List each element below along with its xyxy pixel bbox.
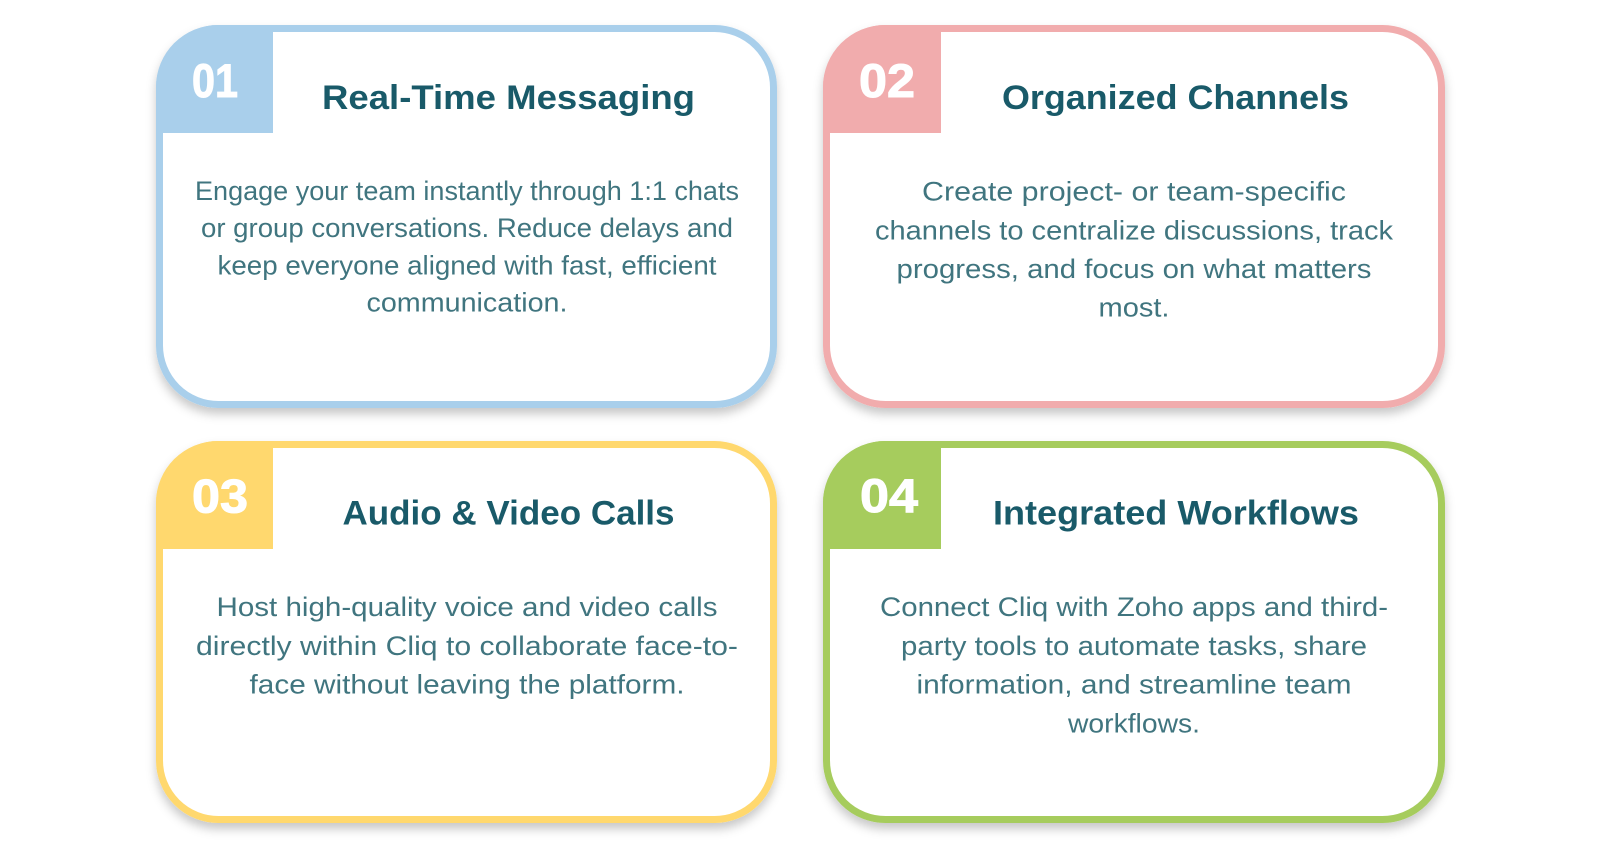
body text: face without leaving the platform.: [250, 670, 684, 700]
body text: most.: [1098, 292, 1170, 322]
heading: Organized Channels: [1002, 79, 1349, 117]
body text: channels to centralize discussions, track: [875, 215, 1394, 245]
body text: or group conversations. Reduce delays and: [201, 213, 733, 243]
body text: [880, 592, 1388, 738]
panel: Real-Time Messaging: [156, 25, 774, 404]
number tab: [823, 441, 941, 549]
body text: communication.: [366, 287, 568, 317]
number 01: 01: [192, 54, 238, 107]
body text: workflows.: [1067, 708, 1200, 738]
body text: Connect Cliq with Zoho apps and third-: [880, 592, 1388, 622]
body text: Create project- or team-specific: [922, 176, 1346, 206]
panel: Organized Channels: [823, 25, 1442, 404]
card outline: [160, 28, 774, 404]
heading: Integrated Workflows: [993, 494, 1359, 532]
body text: Host high-quality voice and video calls: [216, 592, 718, 622]
panel: Audio & Video Calls: [156, 441, 774, 820]
heading: Audio & Video Calls: [342, 494, 674, 532]
card outline: [160, 444, 774, 820]
body text: progress, and focus on what matters: [896, 254, 1372, 284]
number 04: 04: [860, 469, 918, 522]
number 03: 03: [192, 470, 248, 522]
number tab: [823, 25, 941, 133]
number tab: [156, 441, 273, 549]
card outline: [826, 28, 1442, 404]
body text: [875, 176, 1394, 322]
body text: [195, 176, 739, 317]
number 02: 02: [859, 54, 915, 107]
panel: Integrated Workflows: [823, 441, 1442, 820]
body text: directly within Cliq to collaborate face-to-: [196, 631, 738, 661]
body text: party tools to automate tasks, share: [901, 631, 1367, 661]
body text: Engage your team instantly through 1:1 chats: [195, 176, 739, 206]
body text: [196, 592, 738, 700]
body text: information, and streamline team: [916, 670, 1352, 700]
number tab: [156, 25, 273, 133]
heading: Real-Time Messaging: [322, 79, 695, 117]
body text: keep everyone aligned with fast, efficient: [218, 250, 717, 280]
card outline: [826, 444, 1442, 820]
